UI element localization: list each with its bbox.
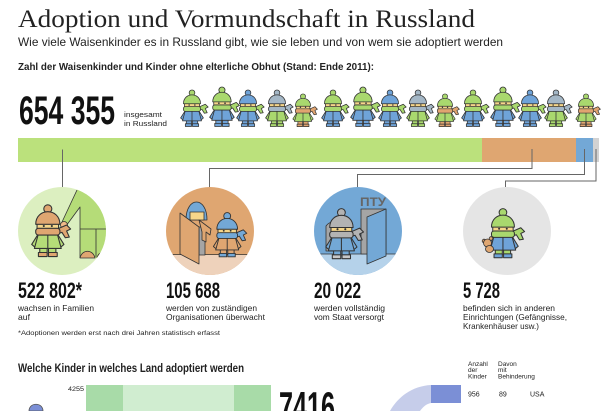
total label: insgesamt	[124, 110, 163, 119]
stat: families	[17, 278, 94, 322]
country table: 89	[499, 392, 507, 398]
stat: families: wachsen in Familien	[17, 303, 94, 313]
adoption bar chart: 4255	[68, 387, 85, 393]
stat: other institutions	[463, 278, 567, 331]
circle: children in families	[18, 185, 110, 275]
icon: child head	[29, 404, 43, 411]
stat: other institutions: 5 728	[463, 278, 500, 303]
circle: state care	[314, 187, 402, 275]
footnote: *Adoptionen werden erst nach drei Jahren statistisch erfasst	[18, 330, 220, 337]
stat: supervised: werden von zuständigen	[165, 303, 257, 313]
stat: supervised: Organisationen überwacht	[166, 312, 266, 322]
icon: teddy bear	[482, 237, 494, 252]
stat: state care: 20 022	[314, 278, 361, 303]
country table	[468, 361, 545, 398]
stat: state care: werden vollständig	[313, 303, 385, 313]
connector lines from bar to circles	[62, 149, 596, 187]
stat: state care: vom Staat versorgt	[314, 312, 385, 322]
subtitle: Wie viele Waisenkinder es in Russland gibt, wie sie leben und von wem sie adoptiert werden	[18, 35, 503, 49]
flow to USA	[390, 385, 461, 411]
country table: 956	[468, 392, 480, 398]
title: Adoption und Vormundschaft in Russland	[18, 6, 476, 33]
row of child icons	[181, 87, 600, 127]
stat: families: auf	[18, 312, 31, 322]
stat: state care	[313, 278, 385, 322]
stat: other institutions: Einrichtungen (Gefängnisse,	[463, 312, 567, 322]
adoption bar chart	[68, 385, 271, 411]
country table: Kinder	[468, 374, 488, 380]
total number: 654 355	[19, 89, 115, 133]
country table: Davon	[498, 361, 517, 368]
stat: other institutions: befinden sich in anderen	[463, 303, 555, 313]
total label	[124, 110, 167, 128]
country table: mit	[498, 367, 507, 374]
stat: supervised	[165, 278, 266, 322]
stat: other institutions: Krankenhäuser usw.)	[463, 321, 539, 331]
country table: der	[468, 367, 478, 374]
circle: other institutions	[463, 187, 551, 275]
section heading: number of orphans: Zahl der Waisenkinder und Kinder ohne elterliche Obhut (Stand: Ende 2011):	[18, 61, 374, 73]
stat: supervised: 105 688	[166, 278, 220, 303]
stat: families: 522 802*	[18, 278, 82, 303]
country table: Behinderung	[498, 374, 535, 380]
section heading: adoption by country: Welche Kinder in welches Land adoptiert werden	[18, 361, 244, 375]
country table: USA	[530, 392, 545, 398]
country table: Anzahl	[468, 361, 488, 368]
circle: state care: ПТУ	[360, 195, 387, 209]
stacked proportion bar	[18, 138, 599, 162]
total label: in Russland	[124, 119, 167, 128]
circle: supervised by authorities	[166, 187, 254, 275]
